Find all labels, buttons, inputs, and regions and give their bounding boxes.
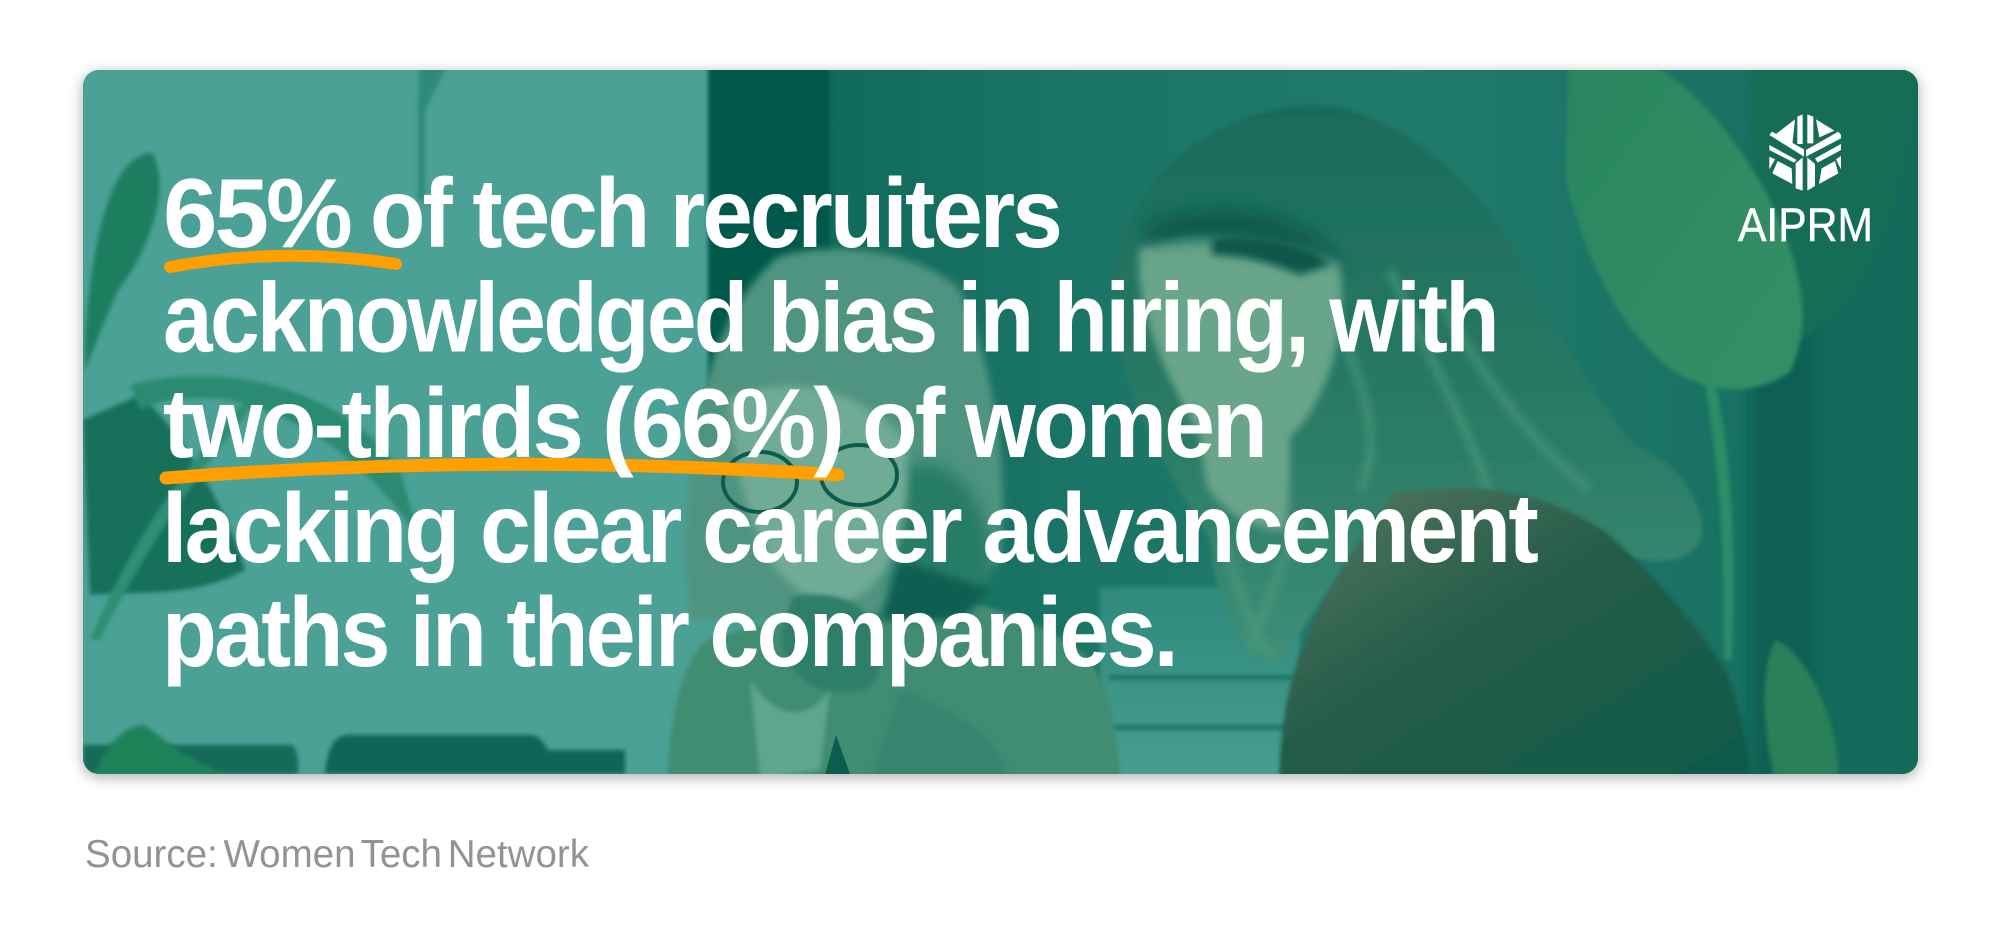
panel: photo card (83, 60, 1930, 790)
heading: main statistic statement: two-thirds (163, 368, 581, 478)
heading: main statistic statement: lacking clear career advancement (162, 473, 1538, 583)
heading: main statistic statement: of tech recruiters (370, 158, 1060, 268)
icon: AIPRM hexagon logo (1769, 114, 1841, 191)
person: woman on right (1114, 105, 1751, 780)
heading: main statistic statement: acknowledged bias in hiring, with (163, 262, 1497, 372)
underline: 65% of (170, 256, 396, 267)
plant: left leaves (83, 153, 420, 640)
heading: main statistic statement: (66%) (602, 368, 842, 478)
bottom-left chairs and plant (83, 725, 625, 774)
heading: main statistic statement: 65% (163, 158, 351, 268)
source note: Source: Women Tech Network (85, 833, 589, 876)
heading: main statistic statement: of women (862, 368, 1265, 478)
heading: main statistic statement (162, 158, 1538, 687)
underline: two-thirds (66%) (166, 464, 838, 478)
photo background: office wall tones (83, 60, 1930, 790)
plant: right leaves (1566, 60, 1915, 780)
person: woman on left (667, 249, 1120, 780)
heading: main statistic statement: paths in their companies. (162, 577, 1176, 687)
logo wordmark: AIPRM (1738, 198, 1873, 251)
